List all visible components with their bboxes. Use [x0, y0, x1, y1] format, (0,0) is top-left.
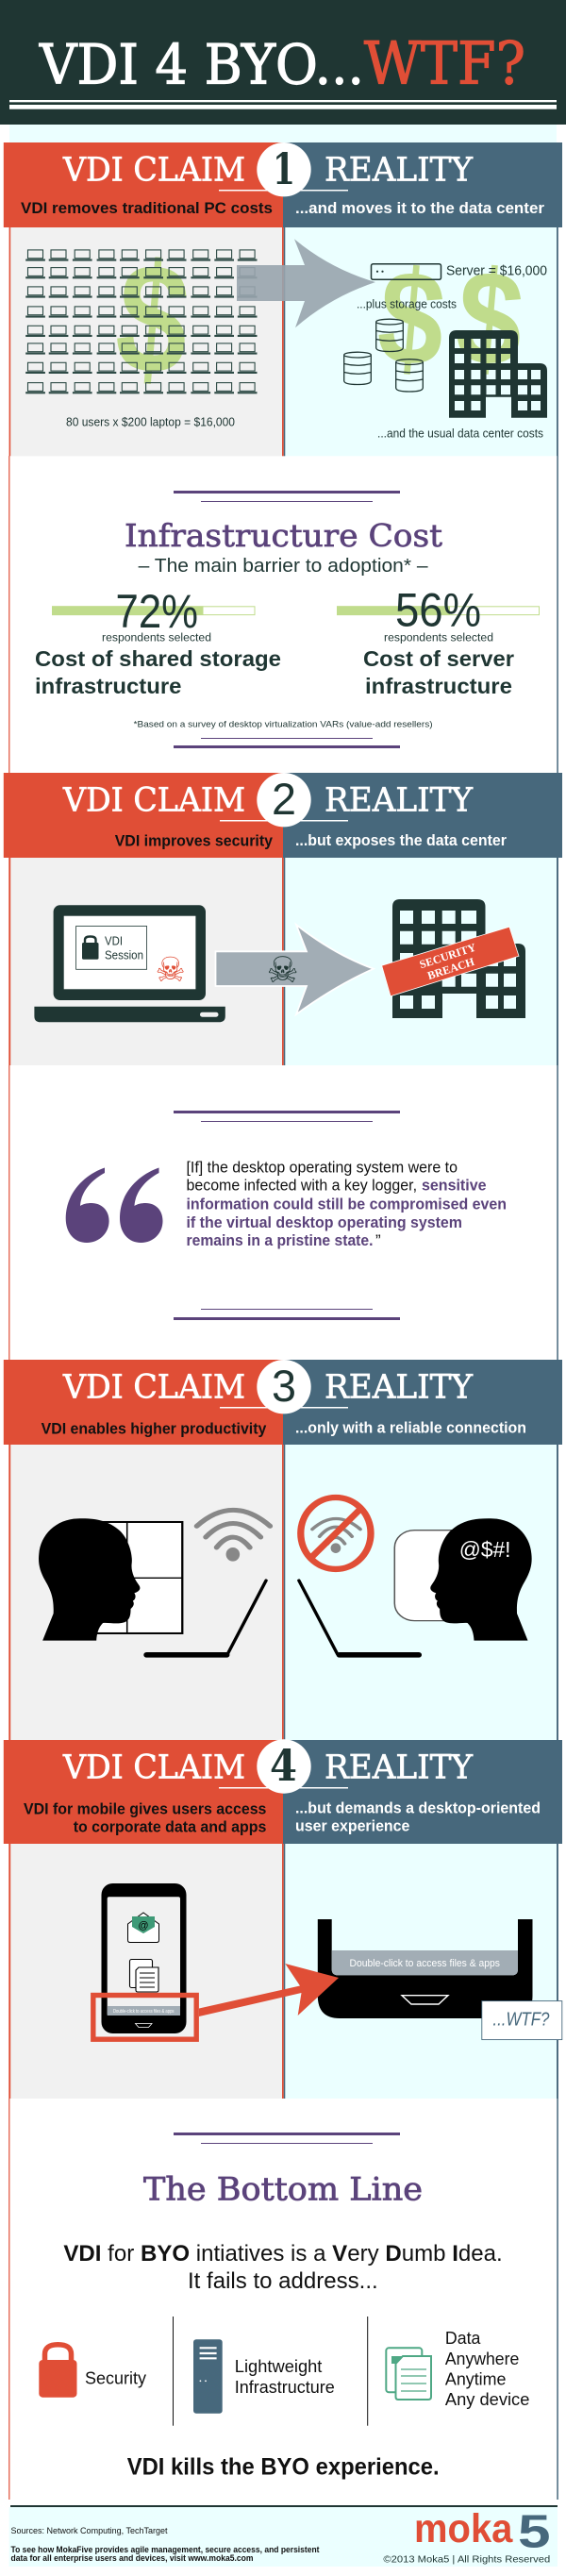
bar chart: 56 percent: respondents selected [384, 632, 493, 644]
header: claim 1: REALITY [325, 152, 474, 190]
laptop cost caption: 80 users x $200 laptop = $16,000 [66, 415, 235, 429]
header: claim 3: 3 [272, 1361, 296, 1411]
laptops grid [25, 250, 258, 393]
header: claim 1: ...and moves it to the data center [295, 199, 544, 217]
header: claim 1 [4, 142, 562, 227]
session label: Session [105, 948, 143, 962]
arrow with skull: ☠ [267, 949, 299, 991]
footnote: *Based on a survey of desktop virtualization VARs (value-add resellers) [134, 720, 433, 730]
data anywhere label: Anytime [445, 2369, 506, 2388]
panel: claim 1 [9, 226, 558, 456]
divider lines top [174, 1111, 400, 1122]
header: claim 2 [4, 773, 562, 858]
lightweight infrastructure label: Lightweight [235, 2357, 322, 2376]
sources: Sources: Network Computing, TechTarget [11, 2526, 168, 2535]
bar chart: 72 percent: infrastructure [35, 674, 181, 698]
logo: moka5: moka [414, 2506, 513, 2551]
header: claim 2: VDI CLAIM [62, 782, 245, 820]
data anywhere label [445, 2329, 529, 2409]
server cost label: Server = $16,000 [446, 264, 547, 279]
heading: Infrastructure Cost [125, 517, 442, 554]
bar chart: 72 percent: respondents selected [102, 632, 211, 644]
data anywhere label: Anywhere [445, 2350, 519, 2368]
statement: VDI for BYO intiatives is a Very Dumb Idea. [63, 2241, 503, 2267]
top pale strip [9, 125, 557, 142]
WTF callout [482, 2001, 562, 2040]
panel backgrounds [9, 857, 558, 1065]
quote text: sensitive [422, 1177, 487, 1195]
header: claim 2: VDI improves security [115, 832, 274, 850]
icon: laptop with VDI session [34, 905, 225, 1022]
header: claim 1: VDI CLAIM [62, 152, 245, 190]
quote text: become infected with a key logger, [187, 1177, 417, 1195]
storage costs label: ...plus storage costs [357, 297, 457, 311]
panel backgrounds [9, 1444, 558, 1741]
panel: claim 4 [9, 1843, 562, 2099]
call to action [11, 2545, 319, 2563]
speech bubble [394, 1531, 474, 1621]
illustration group in zoom coordinates [39, 1497, 532, 1658]
icon: red skull: ☠ [155, 951, 186, 990]
icon: smartphone [102, 1883, 187, 2033]
header: claim 4 [4, 1739, 562, 1844]
icon: wifi [197, 1510, 270, 1562]
icon: open laptop [143, 1581, 266, 1658]
icon: server tower [193, 2339, 223, 2414]
arrow with skull [215, 925, 374, 1014]
data anywhere label: Data [445, 2329, 481, 2348]
bar chart: 56 percent: Cost of server [363, 646, 514, 671]
panel: claim 3 [9, 1444, 558, 1741]
subheading: – The main barrier to adoption* – [139, 556, 429, 577]
header: claim 2: 2 [272, 774, 296, 824]
icon: documents [130, 1959, 158, 1992]
header: claim 4: VDI for mobile gives users access [24, 1799, 266, 1817]
panel: bottom line [39, 2133, 529, 2481]
lightweight infrastructure label: Infrastructure [235, 2378, 335, 2397]
logo: moka5: 5 [518, 2506, 551, 2557]
header: claim 4: user experience [295, 1817, 409, 1835]
header: claim 2: ...but exposes the data center [295, 831, 507, 849]
quote text: remains in a pristine state. [187, 1231, 374, 1249]
panel: quote [66, 1111, 507, 1320]
icon: mail: @ [138, 1920, 149, 1932]
icon: head silhouette mirrored [430, 1518, 532, 1641]
call to action: To see how MokaFive provides agile management, secure access, and persistent [11, 2545, 319, 2554]
logo: moka5 [414, 2506, 551, 2557]
security breach banner: BREACH [425, 955, 476, 982]
icon: big phone bottom: Double-click to access files & apps [349, 1958, 500, 1969]
security breach banner: SECURITY [418, 941, 477, 971]
icon: breached building [382, 899, 525, 1018]
quote text: information could still be compromised even [187, 1196, 507, 1213]
header: claim 3: VDI enables higher productivity [42, 1419, 267, 1437]
panel: claim 2 [9, 857, 558, 1065]
session label: VDI [105, 934, 123, 948]
header: claim 4: 4 [270, 1740, 297, 1791]
header: claim 4: VDI CLAIM [62, 1749, 245, 1787]
icon: quotation marks [66, 1168, 162, 1243]
statement line two: It fails to address... [188, 2268, 378, 2294]
security label: Security [85, 2369, 146, 2388]
panel backgrounds [9, 226, 558, 456]
icon: open laptop mirrored [299, 1581, 422, 1658]
heading: The Bottom Line [143, 2171, 423, 2209]
quote text: if the virtual desktop operating system [187, 1213, 462, 1231]
title text: VDI 4 BYO...WTF? [39, 28, 525, 98]
divider lines top [174, 491, 400, 502]
icon: right dollar signs: $ [451, 242, 529, 396]
header: claim 4: ...but demands a desktop-oriented [295, 1798, 541, 1816]
swearing text: @$#! [459, 1537, 511, 1562]
data anywhere label: Any device [445, 2390, 529, 2409]
header: claim 3 [4, 1360, 562, 1445]
bar chart: 56 percent: 56% [395, 583, 481, 636]
icon: right dollar signs [373, 242, 529, 396]
quote text: ” [375, 1231, 381, 1249]
window behind head [94, 1522, 182, 1633]
panel: infrastructure cost [35, 491, 540, 748]
header: claim 4: REALITY [325, 1749, 474, 1787]
title banner [0, 0, 566, 125]
icon: lock [82, 936, 98, 960]
data center costs label: ...and the usual data center costs [377, 426, 543, 440]
divider lines bottom [174, 738, 400, 748]
divider lines bottom [174, 1309, 400, 1320]
quote text: [If] the desktop operating system were to [187, 1159, 458, 1177]
bar chart: 72 percent: 72% [115, 585, 198, 638]
icon: green documents [386, 2348, 431, 2400]
panel backgrounds [9, 1843, 558, 2099]
header: claim 1: VDI removes traditional PC costs [21, 199, 273, 217]
icon: storage cylinders [344, 319, 423, 392]
icon: mail [128, 1913, 158, 1942]
bar chart: 56 percent [337, 583, 540, 698]
call to action: data for all enterprise users and devices, visit www.moka5.com [11, 2553, 253, 2563]
header: claim 4: to corporate data and apps [74, 1818, 266, 1836]
header: claim 1: 1 [273, 143, 295, 194]
security breach banner [382, 927, 519, 996]
icon: smartphone: Double-click to access files & apps [113, 2009, 175, 2015]
conclusion: VDI kills the BYO experience. [127, 2454, 440, 2481]
bar chart: 56 percent: infrastructure [365, 674, 512, 698]
bar chart: 72 percent: Cost of shared storage [35, 646, 281, 671]
quote text [187, 1159, 507, 1249]
header: claim 3: VDI CLAIM [62, 1369, 245, 1407]
icon: big phone bottom [318, 1919, 532, 2018]
session label [105, 934, 143, 962]
icon: right dollar signs: $ [373, 242, 451, 396]
icon: no wifi [301, 1497, 371, 1569]
icon: red lock [39, 2345, 77, 2398]
session window [76, 927, 147, 969]
icon: data center building [449, 330, 547, 418]
icon: head silhouette [39, 1518, 140, 1641]
side rules [8, 456, 558, 2500]
header: claim 3: ...only with a reliable connection [295, 1418, 526, 1436]
header: claim 2: REALITY [325, 782, 474, 820]
footer [9, 2505, 558, 2567]
column dividers [173, 2317, 368, 2426]
lightweight infrastructure label [235, 2357, 335, 2397]
WTF callout: ...WTF? [492, 2010, 550, 2031]
icon: server [372, 264, 441, 279]
arrow: red [199, 1964, 339, 2016]
arrow [237, 239, 375, 327]
icon: left dollar sign: $ [109, 228, 196, 409]
header: claim 3: REALITY [325, 1369, 474, 1407]
bar chart: 72 percent [35, 585, 281, 698]
highlight frame [93, 1995, 196, 2039]
divider lines [174, 2133, 400, 2144]
copyright: ©2013 Moka5 | All Rights Reserved [383, 2555, 550, 2566]
